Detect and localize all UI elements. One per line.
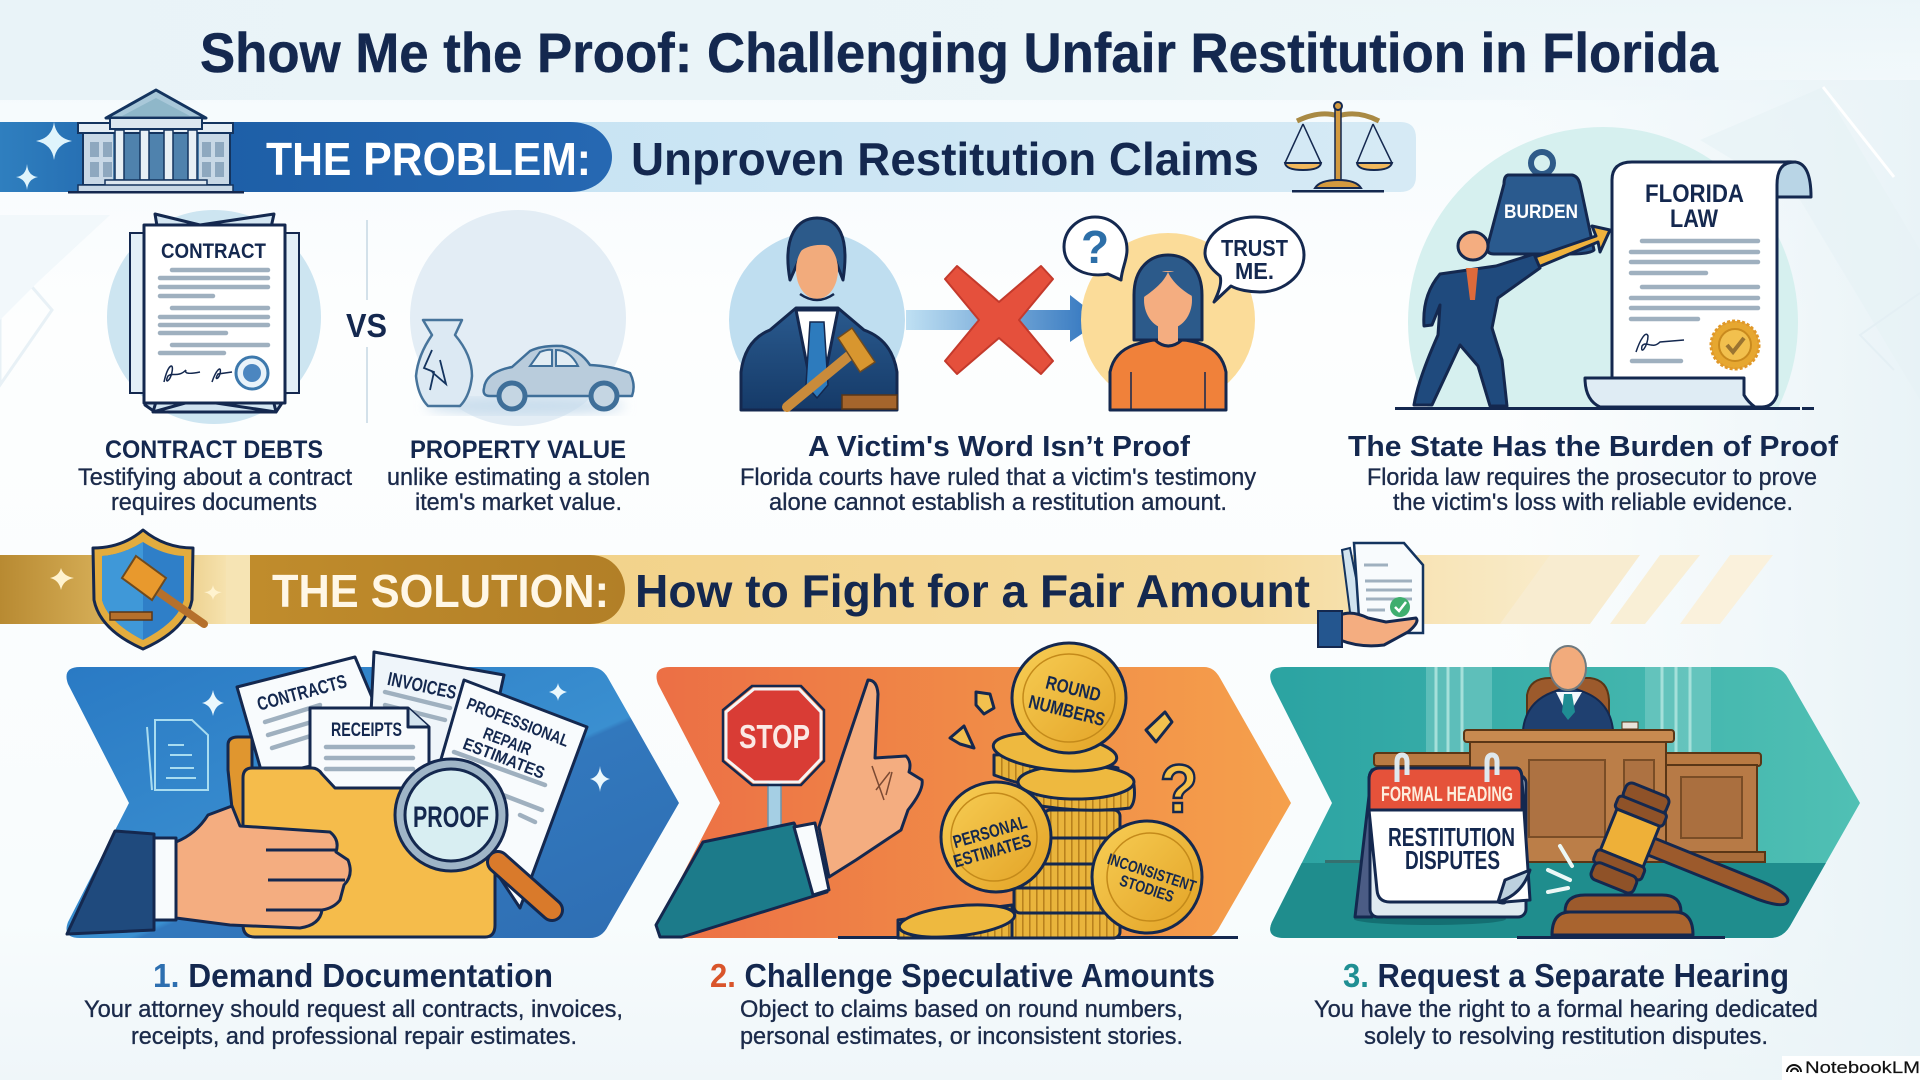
icon: red x <box>945 266 1053 374</box>
magnifier <box>395 759 552 910</box>
text: contract debts <box>78 464 352 516</box>
problem banner <box>0 122 1416 192</box>
document: contracts <box>237 657 393 777</box>
chevron: blue <box>66 667 679 938</box>
chevron: orange <box>656 667 1291 938</box>
document: invoices: INVOICES <box>385 669 458 704</box>
text: property value: unlike estimating a stolen <box>387 464 650 491</box>
icon: judge at bench <box>1374 646 1765 862</box>
solution banner <box>0 555 1773 624</box>
text: burden of proof <box>1367 464 1817 516</box>
label: property value: PROPERTY VALUE <box>410 436 626 464</box>
problem label: THE PROBLEM: <box>266 133 591 185</box>
sparkle <box>16 122 72 190</box>
icon: question bubble <box>1064 217 1127 280</box>
icon: man pushing burden toward florida law scroll <box>1395 127 1814 410</box>
document: professional repair estimates: PROFESSIONAL <box>464 694 572 751</box>
text: step 2: personal estimates, or inconsistent stories. <box>740 1023 1183 1050</box>
badge: notebooklm: NotebookLM <box>1805 1058 1920 1077</box>
text: property value <box>387 464 650 516</box>
chevron: teal <box>1270 667 1860 938</box>
icon: question mark and debris: ? <box>1160 751 1198 827</box>
badge: notebooklm <box>1782 1056 1920 1080</box>
icon: trust me bubble: ME. <box>1235 258 1274 284</box>
icon: sparkles <box>202 683 610 792</box>
sparkle <box>50 568 222 600</box>
man <box>1414 226 1610 406</box>
icon: calendar: FORMAL HEADING <box>1381 783 1513 806</box>
icon: raised hand <box>656 680 922 937</box>
icon: vase and car <box>410 210 634 426</box>
panel: burden of proof <box>1348 127 1838 517</box>
heading: step 3: 3. Request a Separate Hearing <box>1343 957 1789 994</box>
icon: judge figure <box>729 218 905 410</box>
text: a victim's word: Florida courts have ruled that a victim's testimony <box>740 464 1256 491</box>
weight: BURDEN <box>1504 202 1578 223</box>
text: a victim's word: alone cannot establish a restitution amount. <box>769 489 1227 516</box>
icon: calendar <box>1354 755 1530 925</box>
heading: step 1: 1. Demand Documentation <box>153 957 553 994</box>
solution heading: How to Fight for a Fair Amount <box>635 565 1310 617</box>
panel: step 1 demand documentation <box>66 652 679 938</box>
icon: contract document <box>107 210 321 424</box>
courtroom background <box>1270 667 1826 938</box>
coin: personal estimates: ESTIMATES <box>951 830 1033 872</box>
text: step 3 <box>1314 996 1818 1050</box>
coin: inconsistent stories: INCONSISTENT <box>1105 851 1198 896</box>
icon: gavel <box>1517 780 1807 950</box>
text: step 3: You have the right to a formal hearing dedicated <box>1314 996 1818 1023</box>
coin: personal estimates: PERSONAL <box>951 812 1029 852</box>
icon: folder of documents <box>228 652 587 937</box>
weight <box>1487 152 1594 254</box>
text: burden of proof: the victim's loss with reliable evidence. <box>1393 489 1793 516</box>
text: step 1: Your attorney should request all contracts, invoices, <box>84 996 623 1023</box>
label: versus: VS <box>346 307 387 344</box>
heading: burden of proof: The State Has the Burden of Proof <box>1348 431 1838 463</box>
text: step 1 <box>84 996 623 1050</box>
document: professional repair estimates: ESTIMATES <box>460 734 547 783</box>
panel: a victim's word isn't proof <box>729 217 1304 516</box>
icon: stop sign <box>723 686 824 828</box>
text: contract debts: requires documents <box>111 489 317 516</box>
problem heading: Unproven Restitution Claims <box>631 133 1259 185</box>
icon: courthouse <box>68 90 244 194</box>
heading: step 2: 2. Challenge Speculative Amounts <box>710 957 1215 994</box>
panel: property value <box>387 210 650 516</box>
coin: round numbers <box>1012 643 1126 753</box>
text: step 2: Object to claims based on round numbers, <box>740 996 1183 1023</box>
text: step 2 <box>740 996 1183 1050</box>
text: step 1: receipts, and professional repair estimates. <box>131 1023 577 1050</box>
icon: stop sign: STOP <box>739 718 810 755</box>
heading: a victim's word: A Victim's Word Isn’t Proof <box>808 431 1190 463</box>
scroll <box>1585 162 1811 407</box>
scroll: FLORIDA <box>1645 180 1744 208</box>
coin: inconsistent stories: STODIES <box>1117 873 1176 906</box>
panel: step 3 request a separate hearing <box>1260 646 1870 950</box>
text: property value: item's market value. <box>415 489 622 516</box>
text: contract debts: Testifying about a contract <box>78 464 352 491</box>
text: burden of proof: Florida law requires the prosecutor to prove <box>1367 464 1817 491</box>
icon: question bubble: ? <box>1081 221 1109 273</box>
solution label: THE SOLUTION: <box>272 565 609 617</box>
label: contract debts: CONTRACT DEBTS <box>105 436 323 464</box>
icon: small document <box>147 720 208 790</box>
document: professional repair estimates <box>435 680 587 908</box>
icon: trust me bubble: TRUST <box>1221 235 1288 261</box>
text: step 3: solely to resolving restitution disputes. <box>1364 1023 1768 1050</box>
scroll: LAW <box>1670 205 1718 233</box>
document: receipts: RECEIPTS <box>331 720 402 741</box>
text: a victim's word <box>740 464 1256 516</box>
icon: hand holding document <box>1318 543 1423 647</box>
icon: hand and sleeve <box>67 806 350 934</box>
title: Show Me the Proof: Challenging Unfair Restitution in Florida <box>200 21 1719 84</box>
icon: calendar: DISPUTES <box>1405 845 1500 875</box>
icon: calendar: RESTITUTION <box>1388 822 1515 852</box>
magnifier: PROOF <box>413 801 489 834</box>
panel: contract debts <box>78 210 352 516</box>
icon: coin stack <box>838 728 1238 942</box>
document: invoices <box>368 652 504 775</box>
document: receipts <box>310 708 429 790</box>
panel: step 2 challenge speculative amounts <box>656 643 1291 942</box>
coin: round numbers: NUMBERS <box>1026 692 1107 731</box>
icon: woman figure <box>1081 233 1255 410</box>
icon: shield with gavel <box>93 530 204 649</box>
coin: personal estimates <box>941 782 1051 892</box>
icon: question mark and debris <box>950 692 1198 827</box>
coin: round numbers: ROUND <box>1043 673 1103 706</box>
icon: contract document: CONTRACT <box>161 240 266 263</box>
coin: inconsistent stories <box>1092 821 1202 933</box>
folder front <box>243 768 495 937</box>
icon: trust me bubble <box>1205 217 1304 302</box>
arrow: blocked path <box>906 295 1102 342</box>
icon: scales of justice <box>1285 102 1392 192</box>
document: professional repair estimates: REPAIR <box>480 724 534 759</box>
document: contracts: CONTRACTS <box>255 671 349 716</box>
